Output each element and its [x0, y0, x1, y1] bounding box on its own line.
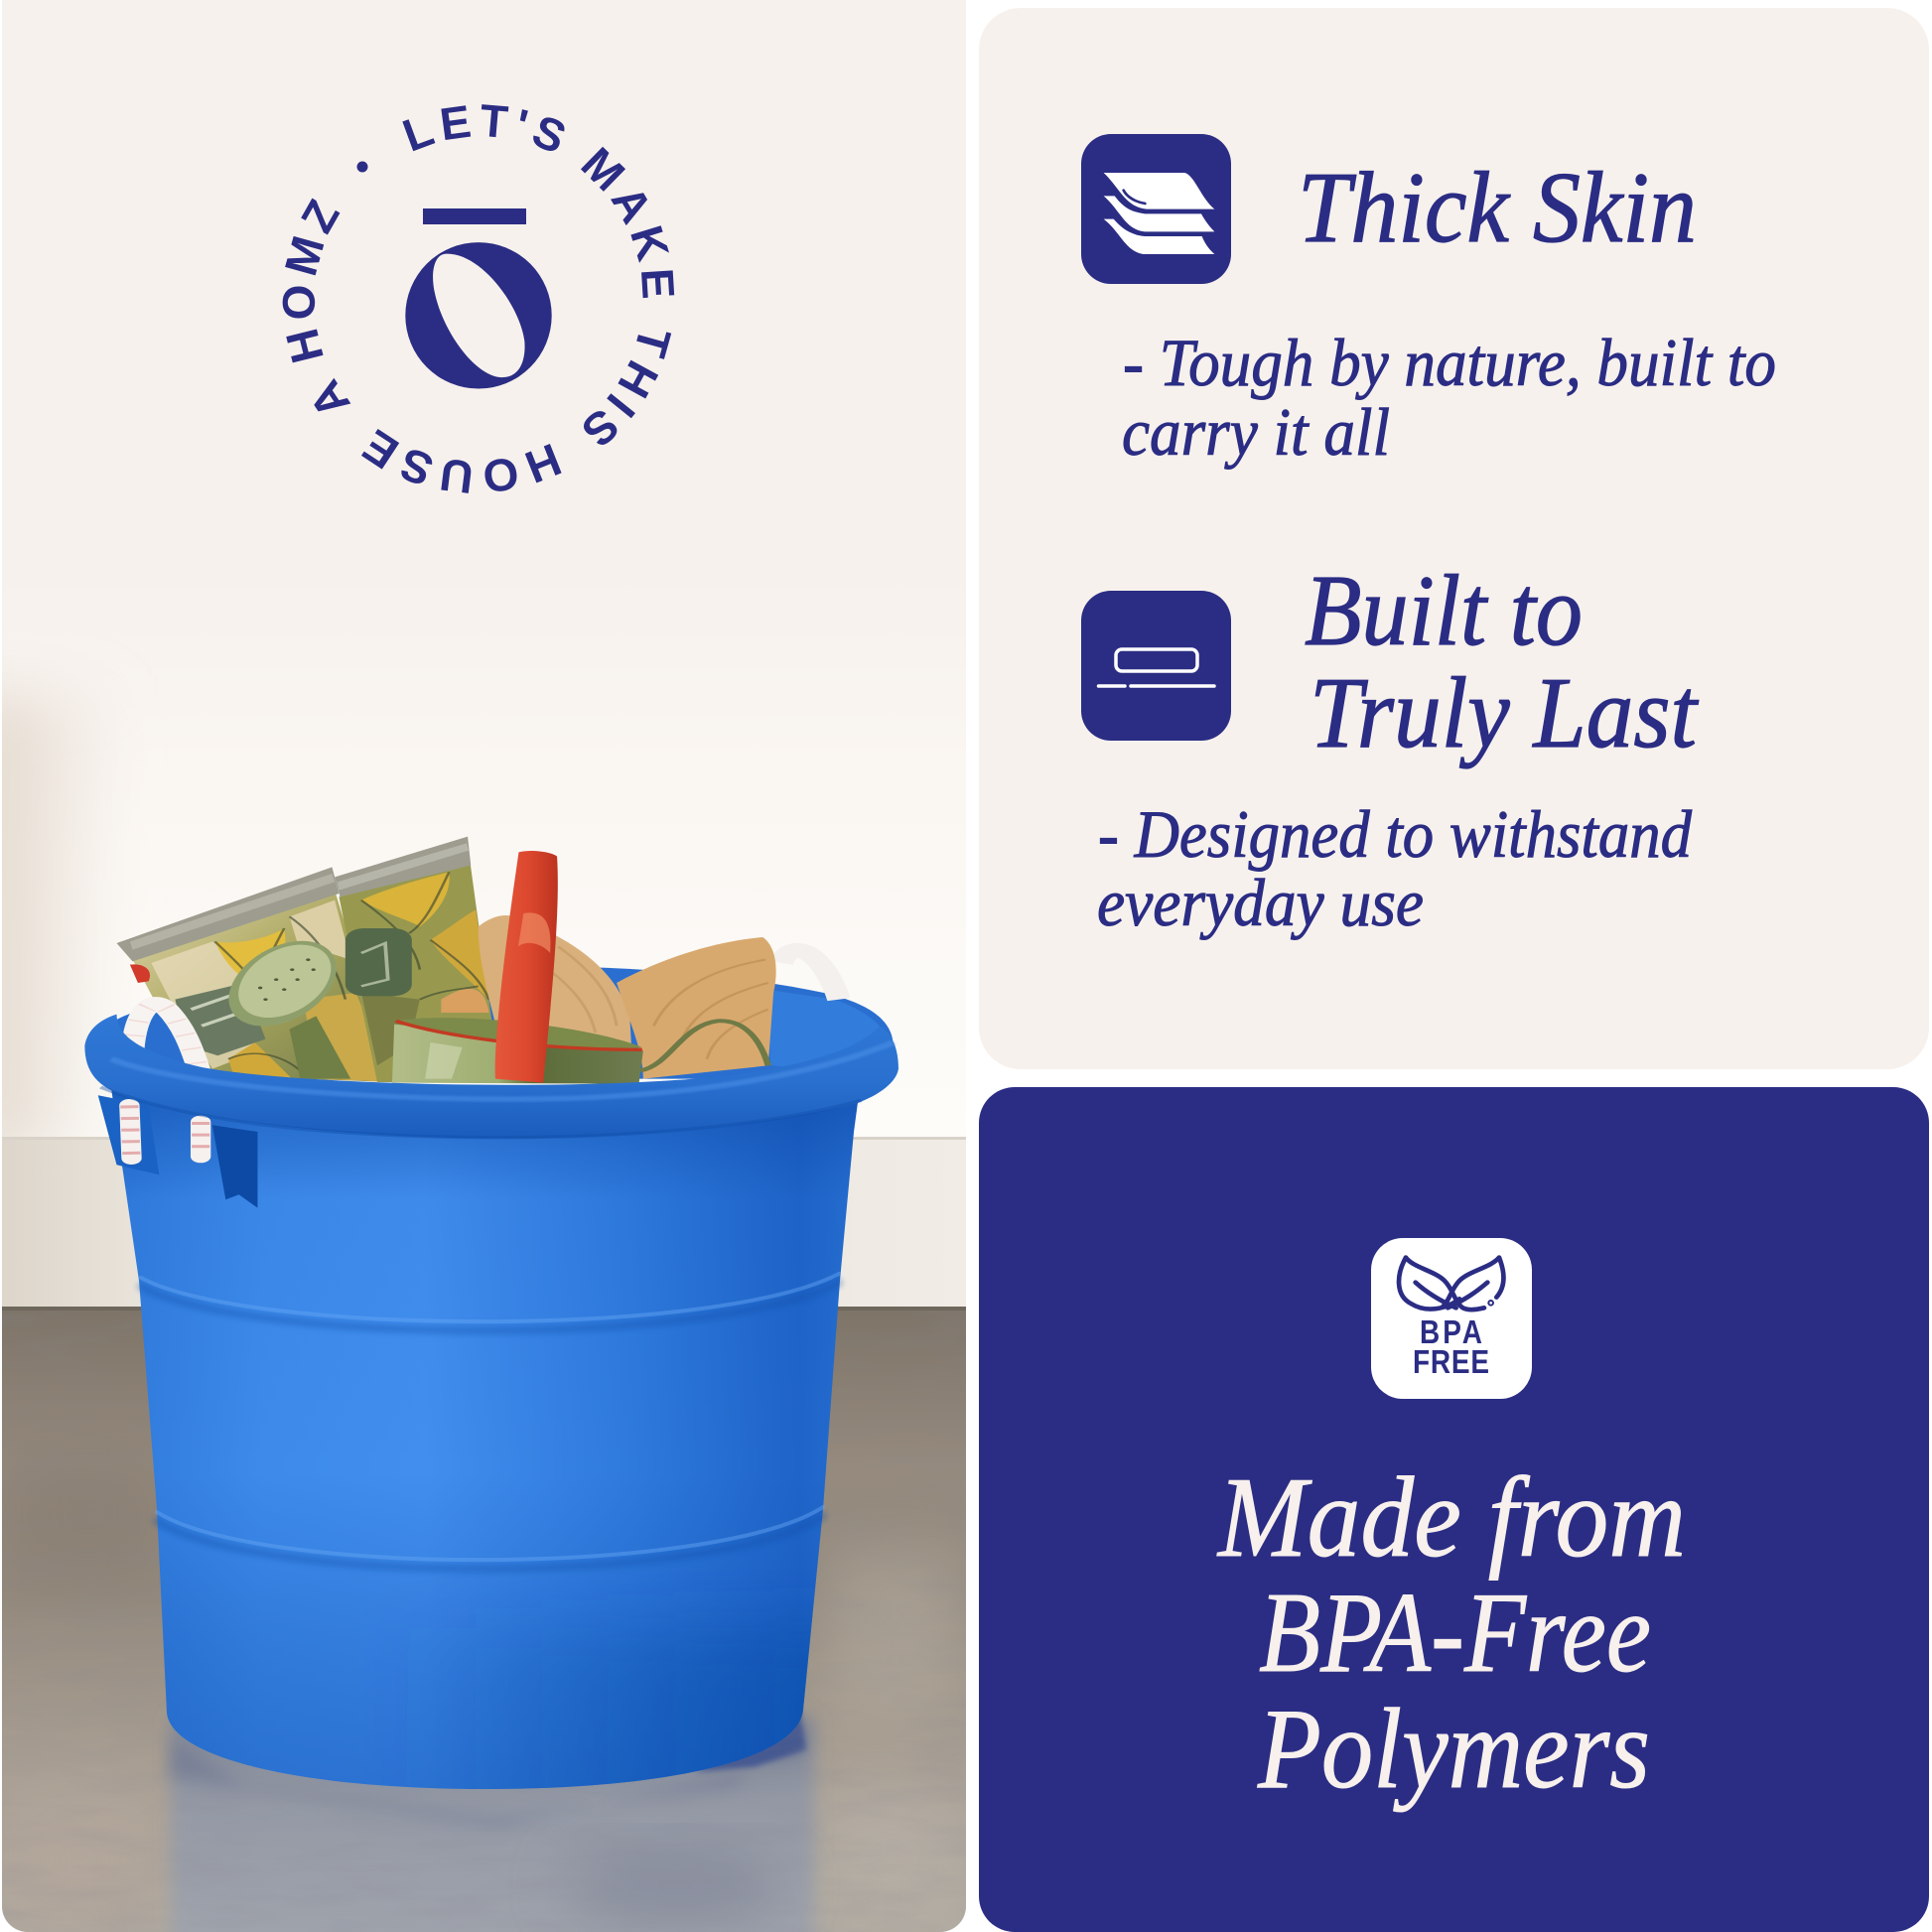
concrete floor — [0, 1311, 966, 1932]
left straw hat — [479, 915, 631, 1043]
text: built to last description: - Designed to withstand — [1098, 796, 1693, 872]
badge text: FREE — [1413, 1343, 1489, 1381]
handle tab left — [98, 1095, 159, 1174]
tub back rim and contents — [90, 837, 894, 1084]
logo o — [405, 242, 552, 389]
watering can body — [175, 928, 412, 1079]
heading: made from BPA-free polymers — [1216, 1454, 1686, 1813]
left rope loop — [133, 1004, 200, 1070]
back rim interior — [90, 966, 894, 1079]
heading: built to truly last: Truly Last — [1310, 657, 1699, 769]
heading: made from BPA-free polymers: Polymers — [1257, 1686, 1650, 1813]
text: thick skin description: carry it all — [1122, 394, 1390, 470]
text: thick skin description — [1122, 325, 1776, 470]
icon: thick skin layers — [1081, 134, 1231, 284]
text: built to last description: everyday use — [1097, 865, 1424, 940]
red handle — [495, 851, 558, 1083]
right straw hat — [617, 937, 776, 1079]
tub body — [111, 1090, 858, 1789]
panel background — [979, 8, 1929, 1069]
left boot — [116, 867, 393, 1082]
heading: built to truly last: Built to — [1305, 555, 1583, 667]
badge text: BPA — [1420, 1313, 1482, 1351]
baseboard — [0, 1137, 966, 1311]
macron bar — [423, 208, 526, 224]
icon: BPA free badge — [1371, 1238, 1532, 1399]
panel: features — [979, 8, 1929, 1069]
wall background — [2, 0, 966, 1025]
text: thick skin description: - Tough by nature, built to — [1123, 325, 1776, 400]
right rope — [781, 950, 839, 1000]
panel: product photo — [0, 0, 966, 1932]
text: built to last description — [1097, 796, 1693, 940]
badge text — [1413, 1313, 1489, 1381]
rim — [84, 1015, 898, 1139]
tub front rim, tabs and rope ends — [84, 1015, 898, 1208]
handle tab shadow — [212, 1125, 257, 1208]
icon: built to last — [1081, 591, 1231, 741]
floor grain — [0, 1311, 966, 1932]
heading: built to truly last — [1305, 555, 1699, 769]
wall shadow — [2, 680, 95, 1137]
floor reflection of tub — [169, 1710, 814, 1932]
enamel cup — [392, 1018, 768, 1084]
heading: thick skin: Thick Skin — [1298, 152, 1697, 264]
heading: made from BPA-free polymers: BPA-Free — [1259, 1570, 1651, 1697]
logo badge — [282, 104, 675, 493]
rope ends — [129, 1105, 201, 1159]
heading: made from BPA-free polymers: Made from — [1216, 1454, 1686, 1582]
separator dot — [357, 161, 367, 173]
circular slogan: LET'S MAKE THIS HOUSE A HOMZ — [282, 104, 675, 493]
body ribs — [141, 1274, 839, 1569]
panel background — [979, 1087, 1929, 1932]
lower right body shading — [533, 1630, 811, 1787]
right boot — [335, 837, 491, 1082]
panel: BPA free — [979, 1087, 1929, 1932]
